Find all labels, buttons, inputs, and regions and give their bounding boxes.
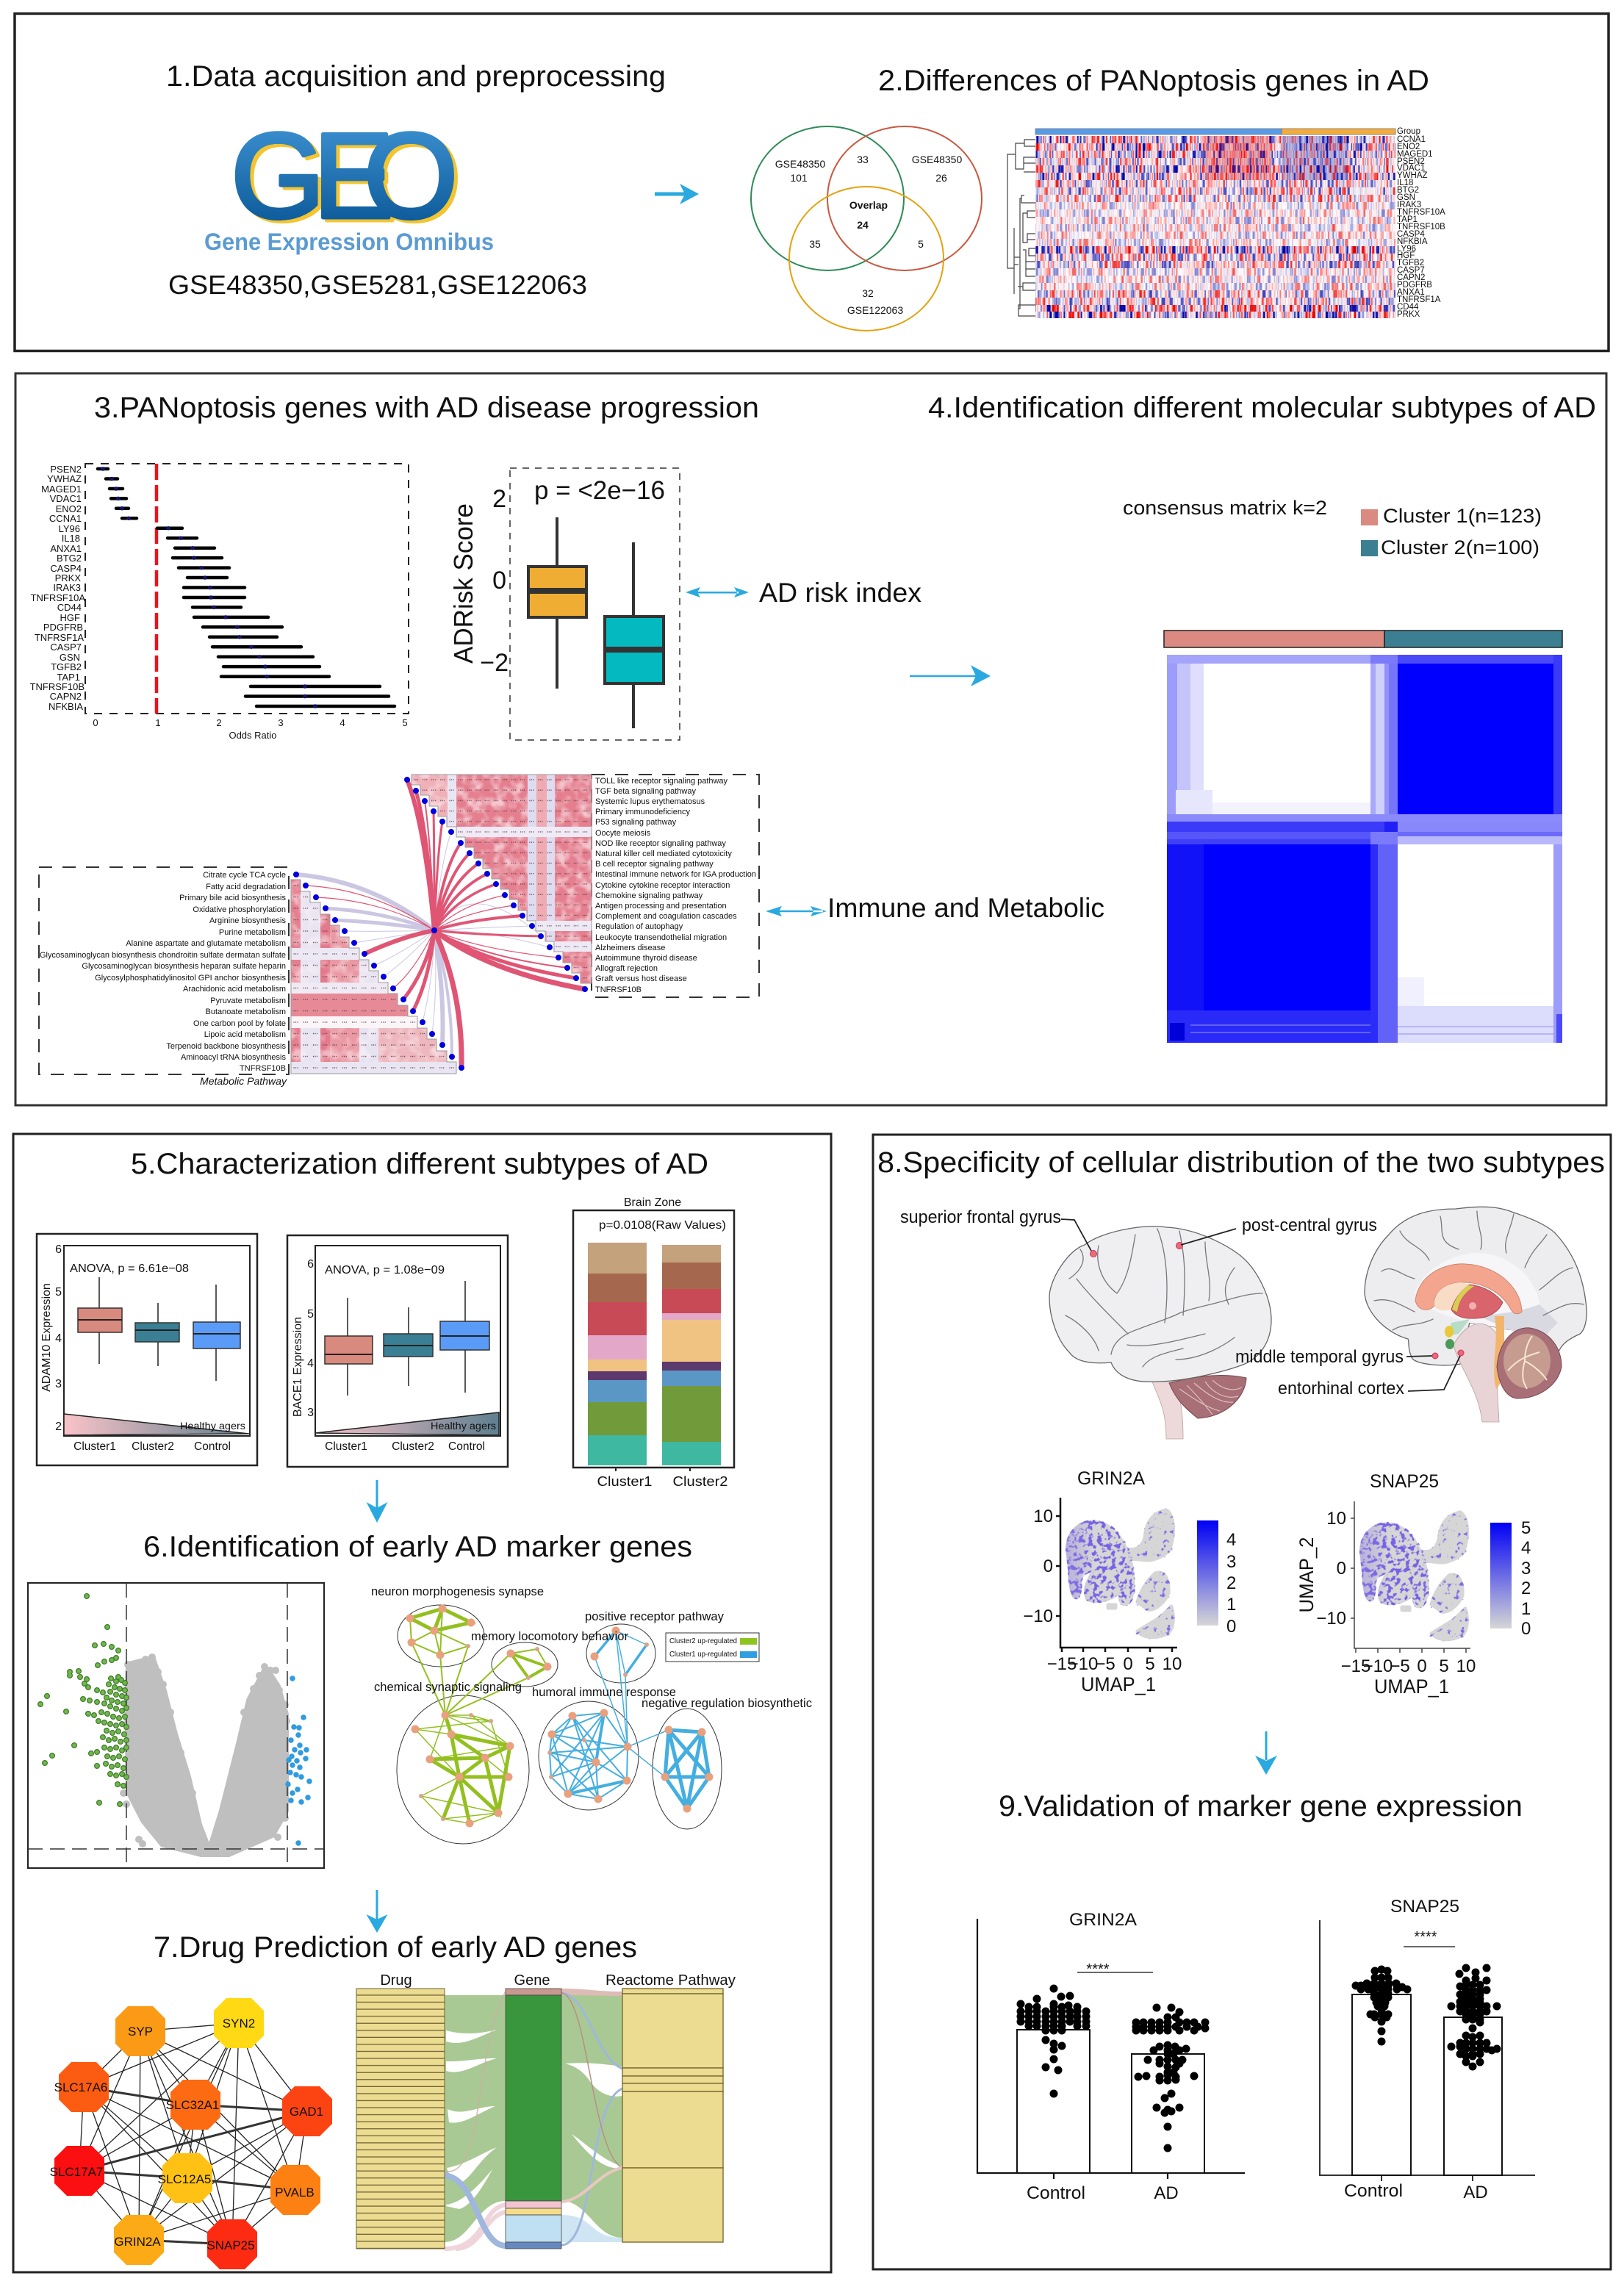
UMAP: SNAP25: SNAP25 — [1370, 1471, 1439, 1492]
metabolic pathway labels: Butanoate metabolism — [206, 1008, 286, 1016]
boxplot: BACE1 expression: 3 — [307, 1407, 314, 1419]
pathway column — [622, 1989, 723, 2242]
immune pathway labels: B cell receptor signaling pathway — [595, 860, 714, 869]
brain region labels and leaders: middle temporal gyrus — [1235, 1347, 1404, 1367]
network labels — [371, 1584, 812, 1710]
immune pathway labels: Regulation of autophagy — [595, 922, 683, 931]
immune pathway labels: Intestinal immune network for IGA production — [595, 870, 756, 879]
forest plot gene labels: TNFRSF10B — [30, 681, 85, 692]
forest plot gene labels: TAP1 — [57, 672, 80, 683]
node: SLC32A1: SLC32A1 — [166, 2098, 219, 2112]
boxplot: ADAM10 expression: 6 — [55, 1243, 62, 1256]
heatmap gene labels: TAP1 — [1397, 215, 1418, 224]
scatter bar chart: GRIN2A: GRIN2A — [1069, 1910, 1137, 1930]
brain region labels and leaders: superior frontal gyrus — [900, 1207, 1061, 1227]
heatmap gene labels: TNFRSF10B — [1397, 223, 1445, 231]
metabolic pathway labels: Primary bile acid biosynthesis — [179, 894, 287, 902]
heatmap gene labels: YWHAZ — [1397, 171, 1428, 180]
dendrogram — [1007, 140, 1035, 316]
arrow: immune and metabolic — [766, 906, 827, 916]
icon: GEO logo: Gene Expression Omnibus — [204, 229, 494, 255]
forest plot axis: 4 — [339, 717, 345, 728]
heatmap gene labels: HGF — [1397, 251, 1415, 260]
scatter bar chart: SNAP25: Control — [1344, 2181, 1403, 2201]
forest plot axis: 0 — [93, 717, 98, 728]
node: GAD1 — [282, 2086, 332, 2136]
forest plot axis: 5 — [402, 717, 408, 728]
UMAP: SNAP25: −15 — [1341, 1656, 1370, 1676]
UMAP: GRIN2A: 0 — [1123, 1654, 1133, 1674]
venn diagram: 26 — [935, 172, 947, 184]
node: SLC12A5: SLC12A5 — [158, 2172, 211, 2186]
consensus matrix heatmap — [1167, 655, 1562, 1043]
cluster annotation bar — [1164, 631, 1562, 647]
forest plot gene labels: CAPN2 — [50, 691, 82, 702]
node: SYN2: SYN2 — [223, 2017, 255, 2030]
network labels: memory locomotory behavior — [471, 1629, 628, 1643]
forest plot axis: 3 — [278, 717, 284, 728]
sankey headers: Reactome Pathway — [606, 1972, 736, 1989]
stacked bar chart: brain zone: Brain Zone — [624, 1196, 681, 1209]
forest plot gene labels: BTG2 — [57, 553, 82, 564]
forest plot gene labels: ENO2 — [56, 503, 82, 514]
sankey headers: Drug — [380, 1972, 412, 1989]
UMAP: SNAP25: 5 — [1439, 1656, 1449, 1676]
scatter bar chart: GRIN2A — [977, 1910, 1245, 2203]
scatter bar chart: SNAP25: SNAP25 — [1390, 1897, 1459, 1917]
node: SLC12A5 — [158, 2153, 212, 2203]
immune pathway labels: TOLL like receptor signaling pathway — [595, 777, 727, 786]
panel: disease progression and subtypes — [15, 373, 1606, 1105]
boxplot: AD risk score: 0 — [492, 567, 506, 595]
node: SLC17A6 — [54, 2062, 109, 2112]
immune pathway labels: P53 signaling pathway — [595, 818, 677, 827]
venn diagram: GSE122063 — [847, 304, 903, 316]
icon: GEO logo: GEO — [234, 111, 461, 246]
heatmap gene labels: Group — [1397, 127, 1420, 136]
node: PVALB: PVALB — [275, 2186, 315, 2199]
UMAP: SNAP25: 1 — [1521, 1599, 1531, 1619]
forest plot gene labels: LY96 — [59, 523, 80, 534]
heatmap gene labels: VDAC1 — [1397, 164, 1425, 173]
risk index label: AD risk index — [759, 578, 922, 608]
immune pathway labels: Alzheimers disease — [595, 944, 665, 952]
heatmap gene labels: TNFRSF1A — [1397, 295, 1441, 304]
UMAP: SNAP25: 0 — [1337, 1559, 1346, 1579]
heatmap gene labels: LY96 — [1397, 245, 1416, 254]
node: SYP: SYP — [128, 2025, 153, 2039]
consensus matrix caption: consensus matrix k=2 — [1123, 497, 1327, 519]
metabolic pathway labels: TNFRSF10B — [240, 1064, 286, 1073]
stacked bar chart: brain zone: Cluster1 — [597, 1474, 653, 1489]
correlation heatmap: metabolic pathways — [39, 867, 457, 1087]
immune pathway labels: TGF beta signaling pathway — [595, 787, 696, 796]
heatmap gene labels: TGFB2 — [1397, 259, 1424, 267]
network legend — [666, 1633, 759, 1662]
forest plot gene labels: CCNA1 — [49, 513, 82, 524]
immune pathway labels: TNFRSF10B — [595, 985, 642, 994]
heatmap gene labels: GSN — [1397, 193, 1415, 202]
forest plot gene labels: PSEN2 — [50, 464, 82, 475]
boxplot: BACE1 expression: Cluster2 — [392, 1440, 434, 1453]
forest plot gene labels: IL18 — [62, 533, 80, 544]
forest plot gene labels — [30, 464, 85, 712]
forest plot gene labels: MAGED1 — [41, 484, 82, 495]
icon: GEO logo: GEO — [231, 108, 458, 243]
forest plot axis: 2 — [216, 717, 222, 728]
boxplot: AD risk score: p = <2e−16 — [534, 476, 665, 505]
heatmap gene labels: PRKX — [1397, 310, 1420, 319]
UMAP: SNAP25: −10 — [1316, 1609, 1346, 1628]
immune and metabolic label: Immune and Metabolic — [827, 893, 1104, 923]
venn diagram: GSE48350 — [912, 154, 962, 165]
arrow: to consensus matrix — [910, 665, 991, 686]
forest plot gene labels: PDGFRB — [43, 622, 83, 633]
metabolic pathway labels: Citrate cycle TCA cycle — [203, 871, 286, 880]
boxplot: BACE1 expression: 5 — [307, 1308, 314, 1321]
heatmap gene labels — [1397, 127, 1445, 319]
boxplot: ADAM10 expression: 4 — [55, 1332, 62, 1345]
UMAP: GRIN2A: 10 — [1163, 1654, 1182, 1674]
network labels: positive receptor pathway — [585, 1609, 724, 1623]
forest plot gene labels: VDAC1 — [50, 493, 82, 504]
UMAP: SNAP25: 4 — [1521, 1538, 1531, 1558]
UMAP: SNAP25: UMAP_2 — [1296, 1537, 1318, 1612]
boxplot: BACE1 expression: BACE1 Expression — [292, 1317, 304, 1417]
boxplot: ADAM10 expression: ADAM10 Expression — [40, 1283, 53, 1392]
boxplot: BACE1 expression: Healthy agers — [431, 1420, 496, 1432]
network labels: humoral immune response — [532, 1685, 676, 1699]
metabolic pathway labels: Glycosylphosphatidylinositol GPI anchor biosynthesis — [95, 974, 286, 983]
UMAP: GRIN2A: 4 — [1226, 1530, 1236, 1550]
immune pathway labels: Antigen processing and presentation — [595, 902, 727, 911]
legend: clusters — [1361, 505, 1542, 559]
forest plot gene labels: GSN — [60, 652, 80, 663]
heatmap gene labels: IL18 — [1397, 179, 1413, 187]
stacked bar chart: brain zone: p=0.0108(Raw Values) — [599, 1219, 726, 1232]
metabolic pathway labels: One carbon pool by folate — [193, 1019, 286, 1028]
heatmap gene labels: ANXA1 — [1397, 288, 1425, 297]
boxplot: ADAM10 expression: Control — [194, 1440, 231, 1453]
forest plot gene labels: CASP7 — [50, 642, 82, 653]
heatmap gene labels: BTG2 — [1397, 186, 1419, 195]
heatmap gene labels: IRAK3 — [1397, 201, 1421, 209]
dataset accession text: GSE48350,GSE5281,GSE122063 — [168, 270, 587, 300]
forest plot gene labels: TNFRSF1A — [35, 632, 84, 643]
UMAP: SNAP25: 2 — [1521, 1579, 1531, 1598]
node: SLC17A7: SLC17A7 — [50, 2165, 103, 2179]
heading 4: 4.Identification different molecular subtypes of AD — [928, 392, 1596, 424]
boxplot: ADAM10 expression: 5 — [55, 1286, 62, 1299]
UMAP: SNAP25: 5 — [1521, 1518, 1531, 1538]
heading 1: 1.Data acquisition and preprocessing — [166, 60, 666, 93]
node: SLC32A1 — [166, 2080, 220, 2130]
UMAP: GRIN2A: 1 — [1226, 1595, 1236, 1615]
forest plot axis: 1 — [155, 717, 161, 728]
arrow: to validation — [1255, 1731, 1277, 1775]
scatter bar chart: GRIN2A: Control — [1027, 2183, 1085, 2203]
network legend: Cluster2 up-regulated — [669, 1637, 737, 1645]
boxplot: BACE1 expression: ANOVA, p = 1.08e−09 — [325, 1264, 445, 1276]
scatter bar chart: SNAP25: AD — [1463, 2183, 1488, 2202]
metabolic pathway labels: Glycosaminoglycan biosynthesis chondroitin sulfate dermatan sulfate — [40, 951, 286, 960]
metabolic pathway labels: Aminoacyl tRNA biosynthesis — [181, 1053, 286, 1062]
venn diagram: 33 — [857, 154, 869, 165]
UMAP: SNAP25: −5 — [1390, 1656, 1410, 1676]
forest plot axis — [93, 717, 408, 741]
boxplot: ADAM10 expression: Cluster1 — [73, 1440, 116, 1453]
UMAP: SNAP25: 0 — [1521, 1619, 1531, 1639]
UMAP: GRIN2A: −10 — [1023, 1606, 1053, 1626]
heatmap gene labels: NFKBIA — [1397, 237, 1428, 246]
illustration: sagittal brain — [1365, 1207, 1587, 1422]
boxplot: ADAM10 expression: Cluster2 — [132, 1440, 174, 1453]
forest plot gene labels: TNFRSF10A — [31, 592, 85, 603]
heatmap gene labels: CCNA1 — [1397, 135, 1426, 144]
boxplot: AD risk score: ADRisk Score — [448, 503, 478, 664]
UMAP: GRIN2A: GRIN2A — [1077, 1468, 1145, 1489]
UMAP: GRIN2A: 5 — [1145, 1654, 1155, 1674]
heatmap gene labels: MAGED1 — [1397, 150, 1433, 159]
immune pathway labels: NOD like receptor signaling pathway — [595, 839, 726, 848]
sankey diagram: drug gene pathway — [356, 1972, 736, 2249]
UMAP: SNAP25: 10 — [1326, 1509, 1346, 1529]
heading 7: 7.Drug Prediction of early AD genes — [154, 1931, 637, 1964]
metabolic pathway caption: Metabolic Pathway — [200, 1075, 287, 1087]
node: SNAP25 — [206, 2219, 257, 2269]
node: SYN2 — [214, 1998, 264, 2048]
UMAP: GRIN2A: 2 — [1226, 1573, 1236, 1593]
immune pathway labels: Primary immunodeficiency — [595, 808, 690, 816]
metabolic pathway labels: Oxidative phosphorylation — [193, 905, 286, 914]
venn diagram — [751, 126, 982, 331]
immune pathway labels: Natural killer cell mediated cytotoxicity — [595, 850, 732, 858]
UMAP: SNAP25: 0 — [1417, 1656, 1427, 1676]
boxplot: BACE1 expression: 4 — [307, 1357, 314, 1370]
panel: subtypes, markers and drugs — [13, 1134, 831, 2272]
forest plot axis: Odds Ratio — [229, 730, 277, 741]
boxplot: ADAM10 expression: Healthy agers — [180, 1420, 245, 1432]
heading 5: 5.Characterization different subtypes of AD — [131, 1148, 708, 1180]
immune pathway labels: Graft versus host disease — [595, 974, 687, 983]
UMAP: SNAP25: −10 — [1363, 1656, 1393, 1676]
enrichment network — [371, 1584, 812, 1844]
immune pathway labels: Oocyte meiosis — [595, 829, 651, 838]
metabolic pathway labels: Fatty acid degradation — [206, 883, 286, 891]
network legend: Cluster1 up-regulated — [669, 1651, 737, 1659]
immune pathway labels: Cytokine cytokine receptor interaction — [595, 881, 730, 890]
scatter bar chart: SNAP25: **** — [1414, 1929, 1437, 1945]
gene column — [506, 1989, 561, 2249]
metabolic pathway labels: Terpenoid backbone biosynthesis — [166, 1042, 286, 1051]
forest plot gene labels: TGFB2 — [51, 661, 82, 672]
immune pathway labels — [595, 777, 756, 994]
heatmap gene labels: CAPN2 — [1397, 273, 1425, 282]
node: GAD1: GAD1 — [290, 2105, 323, 2119]
UMAP: GRIN2A: −10 — [1068, 1654, 1098, 1674]
venn diagram: 32 — [862, 287, 874, 299]
heatmap gene labels: PDGFRB — [1397, 281, 1432, 290]
metabolic pathway labels — [40, 871, 287, 1073]
venn diagram: Overlap — [849, 199, 888, 211]
boxplot: BACE1 expression: Control — [448, 1440, 485, 1453]
UMAP: GRIN2A: 0 — [1226, 1617, 1236, 1637]
scatter bar chart: SNAP25 — [1320, 1897, 1535, 2202]
brain region labels and leaders: post-central gyrus — [1242, 1215, 1377, 1235]
forest plot gene labels: CASP4 — [50, 563, 82, 574]
heading 9: 9.Validation of marker gene expression — [999, 1790, 1523, 1822]
UMAP: GRIN2A: 10 — [1033, 1506, 1053, 1526]
UMAP: GRIN2A: −5 — [1095, 1654, 1115, 1674]
forest plot gene labels: ANXA1 — [50, 543, 82, 554]
venn diagram: 24 — [857, 219, 869, 231]
UMAP: GRIN2A: UMAP_1 — [1081, 1673, 1156, 1695]
heatmap gene labels: CD44 — [1397, 303, 1419, 312]
immune pathway labels: Complement and coagulation cascades — [595, 912, 737, 921]
metabolic pathway labels: Glycosaminoglycan biosynthesis heparan sulfate heparin — [82, 962, 286, 971]
heading 3: 3.PANoptosis genes with AD disease progression — [94, 392, 759, 424]
forest plot gene labels: PRKX — [55, 572, 81, 583]
panel: data acquisition and differences — [15, 13, 1609, 351]
arrow: to marker genes — [366, 1480, 388, 1523]
heatmap gene labels: PSEN2 — [1397, 157, 1425, 166]
boxplot: ADAM10 expression — [37, 1234, 257, 1465]
metabolic pathway labels: Alanine aspartate and glutamate metabolism — [126, 939, 286, 948]
node: SLC17A7 — [50, 2146, 104, 2196]
heatmap gene labels: TNFRSF10A — [1397, 208, 1445, 217]
heatmap gene labels: CASP4 — [1397, 230, 1425, 239]
forest plot gene labels: HGF — [60, 612, 80, 623]
heading 2: 2.Differences of PANoptosis genes in AD — [878, 65, 1429, 97]
heading 6: 6.Identification of early AD marker genes — [143, 1531, 692, 1563]
forest plot: odds ratio — [30, 464, 409, 741]
immune pathway labels: Systemic lupus erythematosus — [595, 797, 705, 806]
venn diagram: 101 — [790, 172, 808, 184]
scatter bar chart: GRIN2A: AD — [1154, 2183, 1179, 2203]
heatmap: PANoptosis gene expression — [1007, 127, 1445, 319]
node: GRIN2A — [114, 2215, 164, 2265]
boxplot: BACE1 expression: 6 — [307, 1258, 314, 1271]
node: SNAP25: SNAP25 — [206, 2238, 255, 2252]
forest plot gene labels: IRAK3 — [53, 582, 81, 593]
node: SYP — [115, 2006, 165, 2056]
UMAP: SNAP25: 10 — [1456, 1656, 1476, 1676]
node: PVALB — [270, 2165, 320, 2215]
UMAP: SNAP25: UMAP_1 — [1374, 1676, 1449, 1698]
venn diagram: 5 — [918, 238, 924, 250]
network labels: negative regulation biosynthetic — [642, 1696, 812, 1710]
node: SLC17A6: SLC17A6 — [54, 2080, 107, 2094]
legend: clusters: Cluster 2(n=100) — [1381, 536, 1539, 559]
arrow: to venn — [655, 184, 699, 204]
UMAP: GRIN2A: −15 — [1047, 1654, 1077, 1674]
sankey headers — [380, 1972, 736, 1989]
stacked bar chart: brain zone — [573, 1196, 734, 1489]
protein interaction network — [50, 1998, 332, 2269]
UMAP: GRIN2A: 0 — [1043, 1556, 1053, 1576]
boxplot: AD risk score: 2 — [492, 485, 506, 513]
venn diagram: GSE48350 — [775, 158, 825, 170]
legend: clusters: Cluster 1(n=123) — [1383, 505, 1542, 527]
metabolic pathway labels: Pyruvate metabolism — [210, 996, 286, 1005]
immune pathway labels: Allograft rejection — [595, 964, 658, 973]
metabolic pathway labels: Lipoic acid metabolism — [204, 1030, 286, 1039]
boxplot: AD risk score — [448, 468, 680, 740]
volcano plot — [28, 1583, 324, 1868]
immune pathway labels: Leukocyte transendothelial migration — [595, 933, 727, 942]
forest plot gene labels: CD44 — [57, 602, 82, 613]
boxplot: ADAM10 expression: 3 — [55, 1378, 62, 1390]
UMAP: GRIN2A: 3 — [1226, 1552, 1236, 1572]
heatmap gene labels: CASP7 — [1397, 266, 1425, 275]
arrow: risk index — [686, 587, 749, 597]
UMAP: SNAP25: 3 — [1521, 1559, 1531, 1579]
arrow: to drug prediction — [366, 1890, 388, 1933]
boxplot: BACE1 expression: Cluster1 — [325, 1440, 367, 1453]
immune pathway labels: Chemokine signaling pathway — [595, 891, 703, 900]
stacked bar chart: brain zone: Cluster2 — [673, 1474, 727, 1489]
heading 8: 8.Specificity of cellular distribution of the two subtypes — [877, 1146, 1605, 1179]
forest plot gene labels: YWHAZ — [47, 473, 82, 484]
correlation heatmap: immune pathways — [408, 772, 759, 997]
brain region labels and leaders: entorhinal cortex — [1278, 1379, 1404, 1398]
UMAP: GRIN2A — [1023, 1468, 1236, 1695]
network labels: chemical synaptic signaling — [374, 1680, 522, 1694]
heatmap gene labels: ENO2 — [1397, 143, 1420, 151]
node: GRIN2A: GRIN2A — [114, 2235, 161, 2249]
metabolic pathway labels: Purine metabolism — [219, 928, 286, 937]
forest plot gene labels: NFKBIA — [48, 701, 83, 712]
UMAP: SNAP25 — [1296, 1471, 1531, 1698]
sankey headers: Gene — [514, 1972, 550, 1989]
boxplot: BACE1 expression — [287, 1235, 508, 1467]
immune pathway labels: Autoimmune thyroid disease — [595, 954, 697, 963]
boxplot: ADAM10 expression: ANOVA, p = 6.61e−08 — [70, 1263, 189, 1275]
boxplot: ADAM10 expression: 2 — [55, 1421, 62, 1433]
panel: cellular distribution and validation — [873, 1135, 1611, 2269]
venn diagram: 35 — [809, 238, 821, 250]
network labels: neuron morphogenesis synapse — [371, 1584, 544, 1598]
scatter bar chart: GRIN2A: **** — [1086, 1961, 1110, 1978]
metabolic pathway labels: Arachidonic acid metabolism — [183, 985, 286, 994]
brain region labels and leaders — [900, 1207, 1460, 1398]
boxplot: AD risk score: −2 — [480, 649, 509, 677]
illustration: lateral brain — [1049, 1227, 1271, 1439]
correlation curves and nodes — [296, 780, 585, 1068]
metabolic pathway labels: Arginine biosynthesis — [209, 916, 286, 925]
